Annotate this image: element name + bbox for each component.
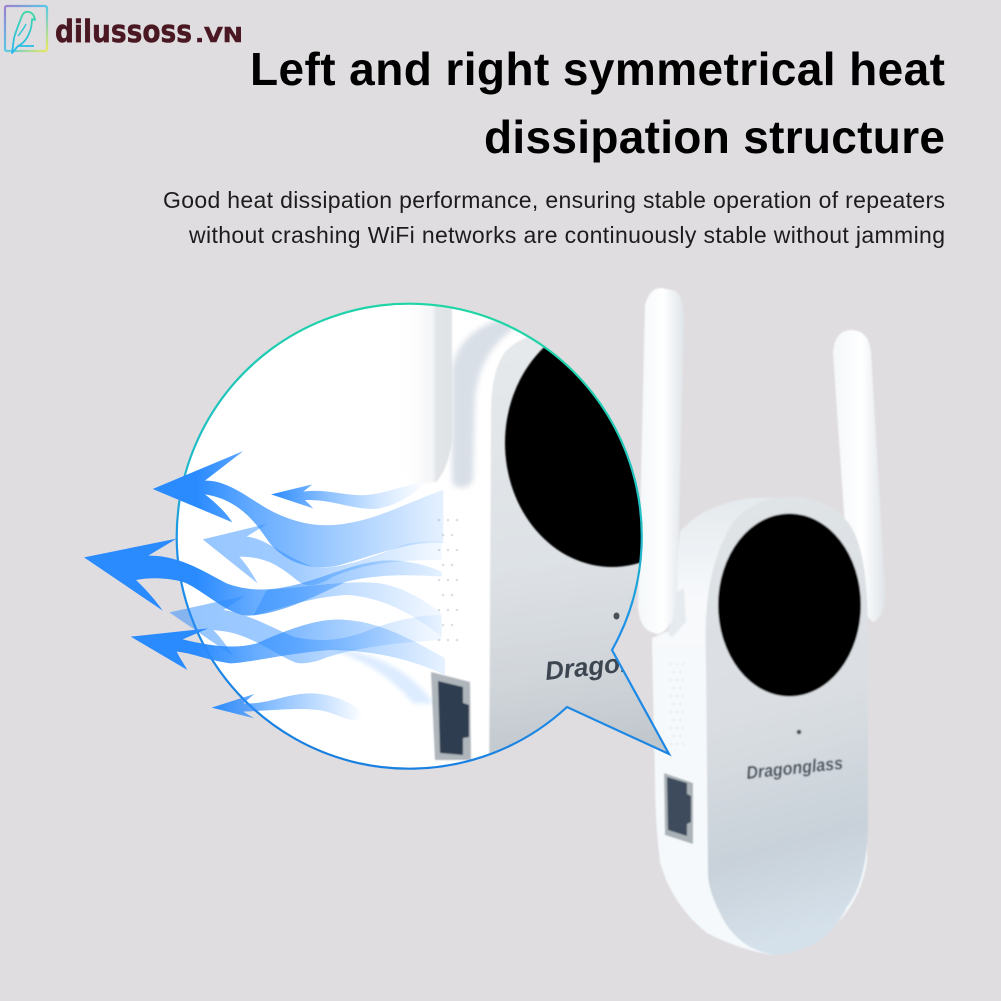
arrow: light lower flow (169, 596, 442, 663)
magnified ethernet port (431, 672, 471, 760)
brand name: .VN (195, 23, 243, 47)
subtitle text (163, 187, 945, 248)
antenna bracket (667, 588, 686, 637)
heat flow arrows (84, 451, 445, 720)
magnified device detail (426, 306, 666, 761)
magnified shoulder (452, 318, 515, 488)
arrow: middle flow (84, 539, 442, 616)
brand name: dilussoss (55, 14, 192, 50)
left antenna (638, 288, 684, 634)
arrow: small top flow (271, 482, 427, 509)
magnified vent dots (438, 519, 458, 641)
logo (5, 6, 243, 53)
magnified black display (504, 347, 641, 568)
subtitle text: without crashing WiFi networks are continuously stable without jamming (188, 222, 945, 248)
magnified brand label: Dragonglass (543, 640, 703, 686)
callout fill (177, 304, 669, 769)
callout: magnified view (176, 302, 672, 770)
arrow: fading middle band (253, 582, 442, 637)
arrow: top flow (153, 451, 443, 567)
brand label: Dragonglass (745, 753, 844, 783)
black display circle (718, 514, 861, 696)
right antenna (833, 330, 885, 622)
title: Left and right symmetrical heat (250, 43, 945, 95)
callout outline (177, 304, 669, 769)
magnified antenna (426, 306, 452, 482)
icon: parrot logo (5, 6, 47, 53)
arrow: small bottom flow (212, 693, 363, 720)
ethernet port (664, 773, 693, 844)
device rear shell (652, 498, 868, 955)
device front face (706, 497, 868, 955)
arrow: light upper flow (203, 524, 442, 585)
magnified front face (488, 338, 666, 754)
magnified indicator light (614, 612, 620, 620)
vent dots (670, 663, 684, 745)
product: WiFi repeater (638, 288, 885, 955)
title (250, 43, 945, 163)
title: dissipation structure (484, 111, 945, 163)
indicator light (797, 730, 801, 734)
arrow: lower flow tail (333, 650, 433, 703)
subtitle text: Good heat dissipation performance, ensuring stable operation of repeaters (163, 187, 945, 213)
arrow: lower flow (131, 619, 445, 675)
